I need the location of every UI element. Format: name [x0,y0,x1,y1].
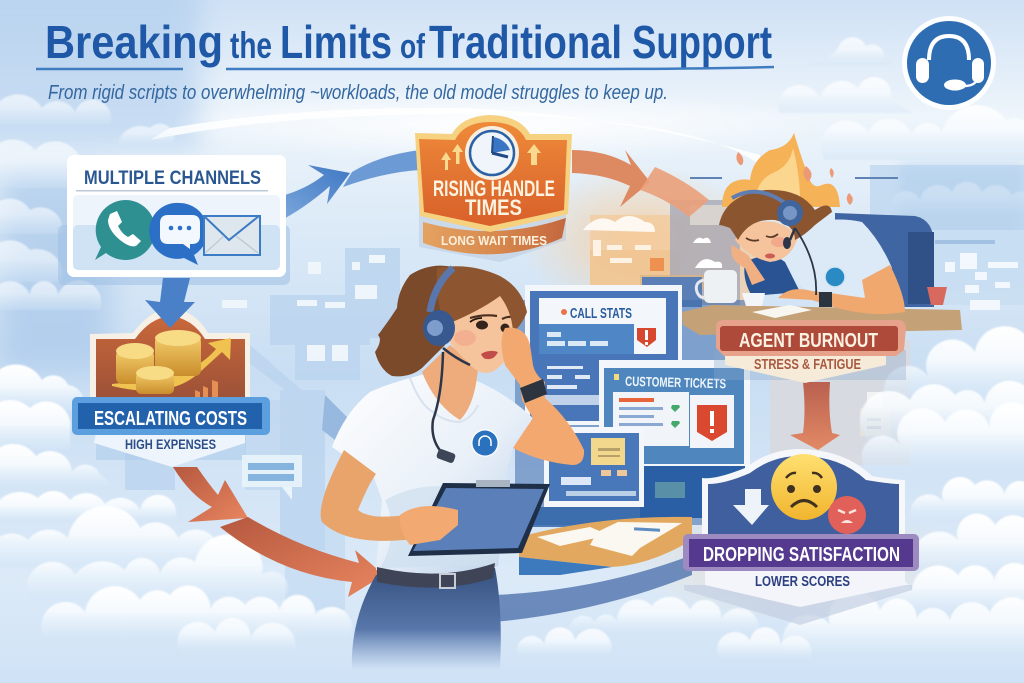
icon: headset logo [902,16,996,110]
icon: chat note [242,455,302,500]
label: customer tickets: CUSTOMER TICKETS [625,374,726,391]
panel: rising handle times: TIMES [465,195,522,220]
hand on clipboard [400,506,458,545]
ground swoosh [495,555,692,622]
city background: warm buildings [583,200,760,307]
icon: gold coins and arrow [112,330,231,394]
clouds: right side banks [782,326,1024,658]
logo badge [825,267,845,287]
panel: escalating costs [72,308,270,467]
head [735,221,797,262]
clouds: bottom centre banks [517,597,812,660]
icon: up arrows [441,144,541,170]
title: Support [632,16,772,68]
subtitle: From rigid scripts to overwhelming ~workloads, the old model struggles to keep up. [48,82,668,104]
clouds: left side banks [0,364,352,652]
label: long wait times: LONG WAIT TIMES [441,233,547,248]
arrow: burnout to satisfaction [790,382,840,450]
pants [352,568,501,670]
wristwatch [520,379,547,403]
hair front [437,266,527,332]
hair back [375,266,470,376]
arrow: channels to costs [145,278,195,328]
icon: flames [722,133,853,207]
icon: phone bubble [95,200,155,260]
monitor: customer tickets [599,360,750,470]
arm [778,265,905,314]
headset cord [432,352,443,454]
desk with papers [515,507,692,575]
monitor: call stats [525,285,682,425]
agent: overwhelmed woman [321,266,584,670]
hair [719,190,832,240]
icon: down arrow [733,489,769,525]
saucer cup [742,293,765,306]
lower arm [321,450,432,541]
title underline [36,67,774,69]
title: of [400,28,426,66]
desk [682,305,962,335]
arrow: handle times to burnout [572,150,709,217]
title: the [230,25,272,66]
heading: multiple channels: MULTIPLE CHANNELS [84,168,261,189]
shirt [332,370,533,574]
label: high expenses: HIGH EXPENSES [125,437,216,452]
agent: burned out at desk [682,133,962,335]
label: stress and fatigue: STRESS & FATIGUE [754,357,861,373]
body [775,220,892,298]
neck [422,345,478,420]
panel: dropping satisfaction [683,449,919,625]
clouds: top left [0,94,174,310]
propping hand [731,245,765,285]
arrow: channels to handle times [278,150,420,222]
clipboard [408,480,550,556]
label: agent burnout: AGENT BURNOUT [739,330,878,352]
headset [430,268,453,312]
icon: angry face [828,496,866,534]
icon: alert shield large [697,405,727,441]
icon: envelope [204,216,260,255]
city background: right side [690,165,1024,465]
label: rising handle times: RISING HANDLE [433,176,555,201]
face [445,294,514,373]
panel: multiple channels [58,155,290,285]
city background: left buildings [125,248,400,610]
chair [835,213,934,307]
coffee mug [696,270,737,303]
icon: chat bubble [149,203,208,265]
raised arm [502,328,584,465]
arrow: costs to customer agent [173,467,384,597]
panel: agent burnout [714,320,906,383]
title: Limits [280,16,392,68]
label: escalating costs: ESCALATING COSTS [94,408,247,430]
title: Traditional [429,16,622,68]
panel: rising handle times [415,115,572,262]
icon: clock [465,126,519,180]
icon: sad face [771,454,837,520]
label: call stats: CALL STATS [570,306,632,322]
icon: alert shield [637,328,656,347]
divider rule [76,190,268,192]
monitor: small notes [544,427,745,518]
label: dropping satisfaction: DROPPING SATISFACTION [703,544,900,566]
title: Breaking [45,16,223,68]
belt [377,563,495,588]
back wall behind monitors [515,300,750,525]
label: lower scores: LOWER SCORES [755,574,850,590]
wristwatch [819,292,832,307]
logo badge on shirt [471,429,499,457]
headset [732,192,790,207]
title [45,16,772,68]
clouds: top right [778,37,1024,213]
red cup [927,287,947,305]
